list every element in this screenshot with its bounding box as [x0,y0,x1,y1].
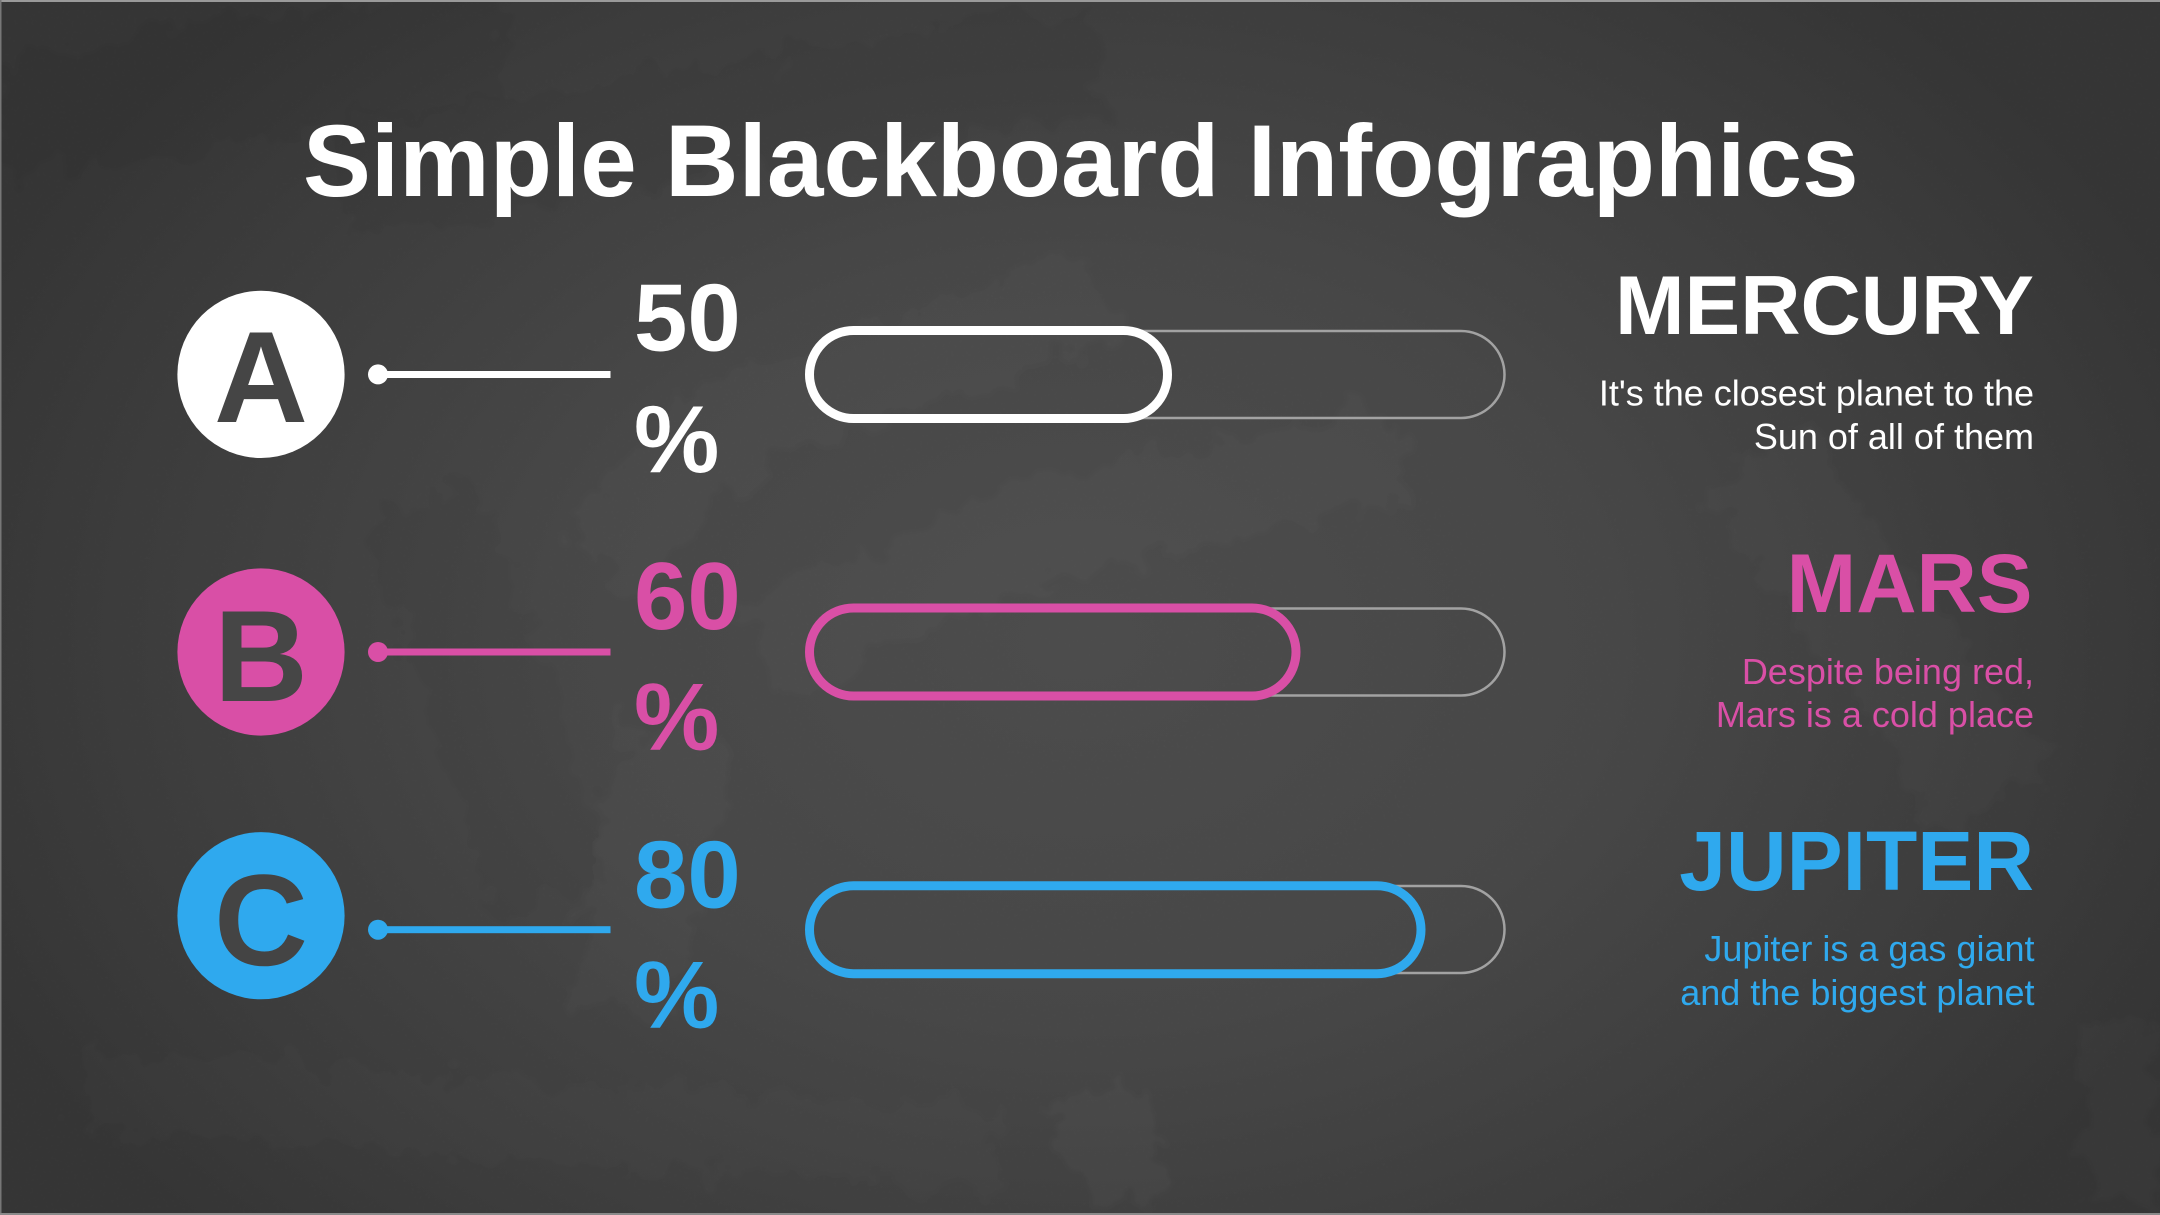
description Mercury: Sun of all of them [1754,416,2034,457]
title: Simple Blackboard Infographics [303,104,1859,218]
percent C: % [634,942,719,1049]
heading Jupiter: JUPITER [1679,814,2034,908]
percent B: 60 [634,543,741,650]
row C: Jupiter [177,814,2034,1049]
progress bar A [807,330,1504,418]
connector A [368,364,610,384]
badge B: B [214,583,308,729]
badge A: A [214,304,308,450]
heading Mercury: MERCURY [1615,258,2034,352]
percent A: 50 [634,264,741,372]
badge B [177,568,345,736]
percent A: % [634,386,719,494]
connector B [368,642,610,662]
row B: Mars [177,536,2034,771]
description Jupiter: and the biggest planet [1680,972,2034,1013]
badge A [177,291,345,458]
percent B: % [634,664,719,771]
badge C [177,832,345,999]
connector C [368,920,610,940]
description Mars: Despite being red, [1742,651,2034,692]
row A: Mercury [177,258,2034,494]
progress bar B [807,608,1504,696]
description Mercury: It's the closest planet to the [1599,372,2034,414]
description Mars: Mars is a cold place [1716,694,2034,735]
progress bar C [807,886,1504,974]
percent C: 80 [634,821,741,928]
description Jupiter: Jupiter is a gas giant [1704,928,2034,969]
heading Mars: MARS [1787,536,2032,630]
badge C: C [214,847,308,993]
